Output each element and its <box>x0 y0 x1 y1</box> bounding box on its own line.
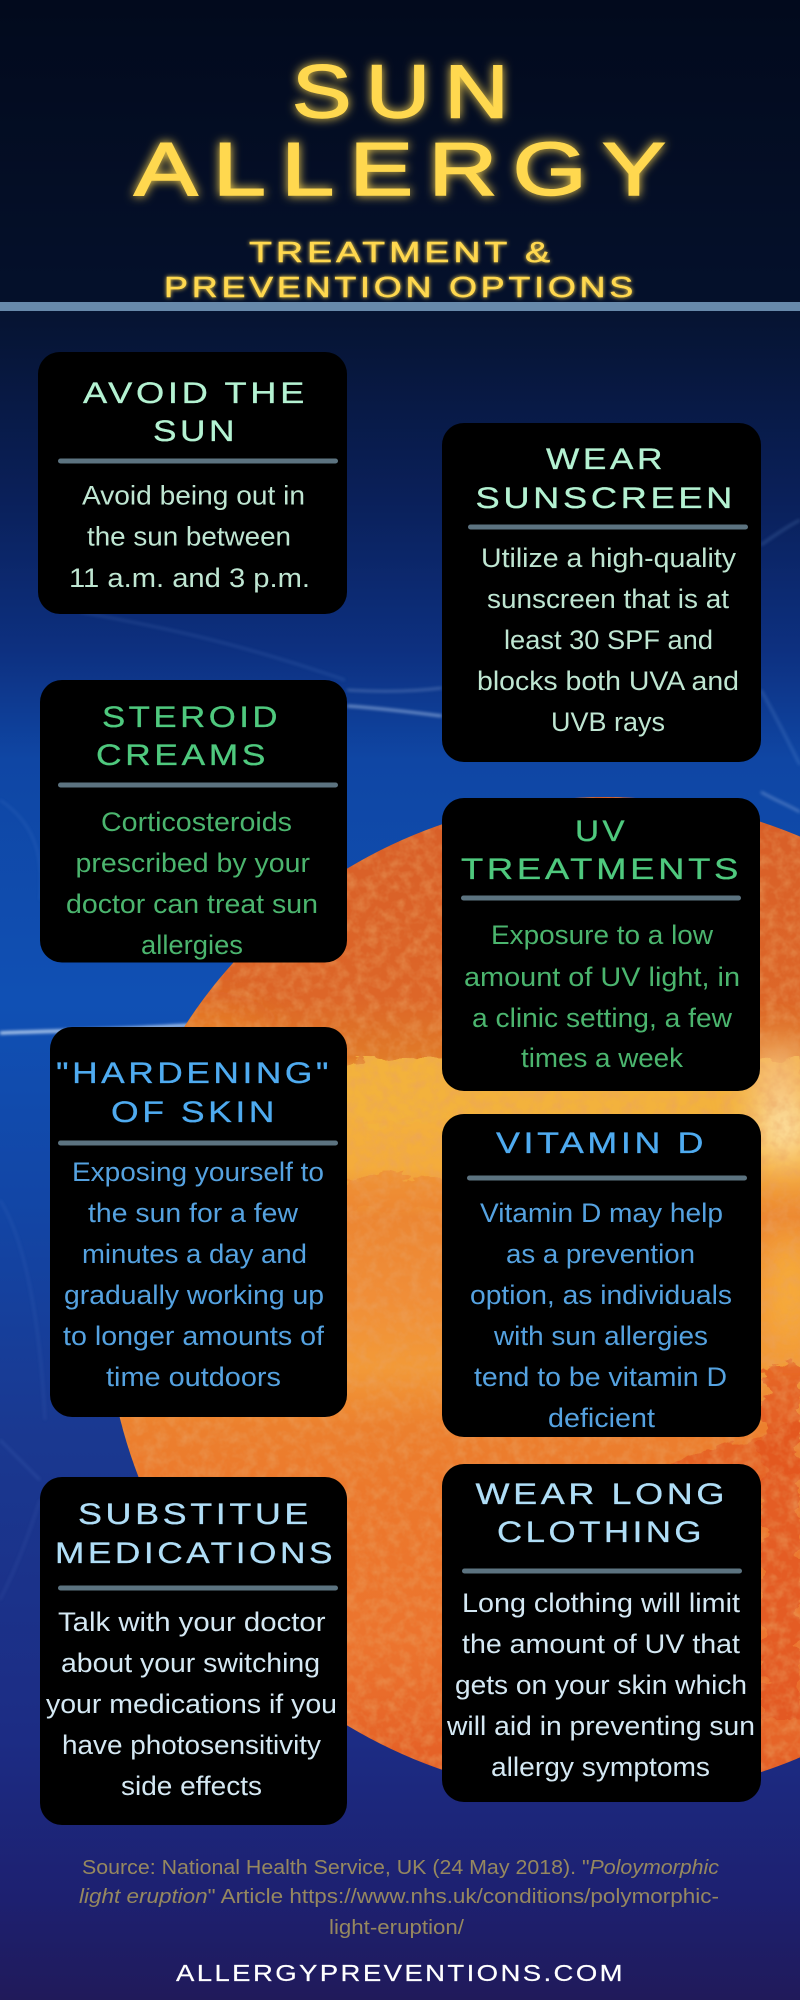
body text: doctor can treat sun <box>66 889 318 919</box>
heading: SUNSCREEN <box>476 482 736 515</box>
title line 2: ALLERGY <box>134 127 681 211</box>
card background <box>442 423 761 762</box>
heading: WEAR LONG <box>476 1478 728 1511</box>
body text: Exposure to a low <box>491 920 714 950</box>
watercolour: yellow band edge <box>347 1056 800 1720</box>
heading: SUN <box>153 415 238 448</box>
card background <box>442 1114 761 1437</box>
body text <box>46 1607 337 1801</box>
body text: about your switching <box>61 1648 320 1678</box>
body text: UVB rays <box>551 707 665 737</box>
card background <box>40 680 347 962</box>
source citation: light-eruption/ <box>329 1917 464 1939</box>
body text: amount of UV light, in <box>464 962 740 992</box>
heading <box>96 701 281 772</box>
header divider <box>0 302 800 311</box>
heading: STEROID <box>102 701 281 734</box>
background light wisps <box>0 520 800 1600</box>
source citation <box>79 1857 719 1939</box>
body text: Long clothing will limit <box>462 1588 741 1618</box>
panel: UV treatments <box>442 798 760 1091</box>
body text: minutes a day and <box>82 1239 307 1269</box>
body text: will aid in preventing sun <box>446 1711 755 1741</box>
sun disc <box>100 790 800 1800</box>
card background <box>38 352 347 614</box>
panel: wear long clothing <box>442 1464 761 1802</box>
body text: a clinic setting, a few <box>472 1003 733 1033</box>
body text: as a prevention <box>506 1239 695 1269</box>
heading <box>476 443 736 515</box>
body text <box>446 1588 755 1782</box>
panel: vitamin D <box>442 1114 761 1437</box>
source citation: Source: National Health Service, UK (24 May 2018). " Poloymorphic <box>82 1857 719 1879</box>
card background <box>442 798 760 1091</box>
body text: Talk with your doctor <box>58 1607 326 1637</box>
body text: the sun for a few <box>88 1198 299 1228</box>
body text: time outdoors <box>106 1362 281 1392</box>
body text: have photosensitivity <box>62 1730 322 1760</box>
footer website: ALLERGYPREVENTIONS.COM <box>176 1960 625 1986</box>
panel: substitute medications <box>40 1477 347 1825</box>
body text: Corticosteroids <box>101 807 292 837</box>
body text <box>477 543 739 737</box>
body text: the sun between <box>87 522 291 552</box>
watercolour: soft colour patches <box>130 1010 800 1350</box>
source citation: light eruption " Article https://www.nhs.uk/conditions/polymorphic- <box>79 1886 719 1908</box>
body text <box>464 920 740 1073</box>
body text <box>470 1198 732 1433</box>
panel: steroid creams <box>40 680 347 962</box>
body text: option, as individuals <box>470 1280 732 1310</box>
panel: avoid the sun <box>38 352 347 614</box>
body text: gets on your skin which <box>455 1670 747 1700</box>
heading: WEAR <box>546 443 666 476</box>
panel: wear sunscreen <box>442 423 761 762</box>
watercolour mottling <box>100 790 800 1800</box>
card background <box>50 1027 347 1417</box>
body text: to longer amounts of <box>63 1321 325 1351</box>
heading <box>83 377 308 448</box>
body text: sunscreen that is at <box>487 584 730 614</box>
body text: with sun allergies <box>493 1321 708 1351</box>
body text <box>63 1157 325 1392</box>
title line 1: SUN <box>292 50 523 134</box>
subtitle <box>164 237 637 304</box>
heading: VITAMIN D <box>496 1127 707 1160</box>
body text: allergies <box>141 930 243 960</box>
heading <box>476 1478 728 1549</box>
body text: times a week <box>521 1043 684 1073</box>
body text: deficient <box>548 1403 656 1433</box>
card background <box>40 1477 347 1825</box>
heading <box>56 1057 332 1129</box>
body text: Utilize a high-quality <box>481 543 737 573</box>
card background <box>442 1464 761 1802</box>
panel: hardening of skin <box>50 1027 347 1417</box>
body text: Avoid being out in <box>82 480 305 510</box>
body text: prescribed by your <box>76 848 310 878</box>
title <box>134 50 681 211</box>
heading: OF SKIN <box>111 1096 278 1129</box>
body text: allergy symptoms <box>491 1752 710 1782</box>
heading: "HARDENING" <box>56 1057 332 1090</box>
heading: CREAMS <box>96 739 269 772</box>
body text: Vitamin D may help <box>480 1198 723 1228</box>
heading <box>55 1498 336 1570</box>
body text: least 30 SPF and <box>504 625 713 655</box>
heading <box>461 815 742 886</box>
subtitle line 2: PREVENTION OPTIONS <box>164 272 637 304</box>
sun <box>100 790 800 1800</box>
heading: AVOID THE <box>83 377 308 410</box>
subtitle line 1: TREATMENT & <box>249 237 554 269</box>
heading: CLOTHING <box>497 1516 705 1549</box>
body text <box>66 807 318 960</box>
heading: SUBSTITUE <box>78 1498 312 1531</box>
body text: gradually working up <box>64 1280 324 1310</box>
body text: tend to be vitamin D <box>474 1362 727 1392</box>
heading: TREATMENTS <box>461 853 742 886</box>
body text: side effects <box>121 1771 262 1801</box>
body text: blocks both UVA and <box>477 666 739 696</box>
heading: MEDICATIONS <box>55 1537 336 1570</box>
body text: your medications if you <box>46 1689 337 1719</box>
body text <box>69 480 310 593</box>
body text: Exposing yourself to <box>72 1157 324 1187</box>
body text: the amount of UV that <box>462 1629 741 1659</box>
header band <box>0 0 800 302</box>
heading: UV <box>575 815 628 848</box>
body text: 11 a.m. and 3 p.m. <box>69 563 310 593</box>
